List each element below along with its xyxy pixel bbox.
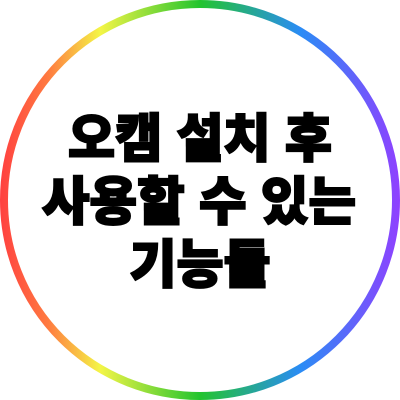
title <box>42 111 356 295</box>
title line 1: 오캠 설치 후 <box>68 111 332 169</box>
title line 2: 사용할 수 있는 <box>42 174 356 232</box>
title line 3: 기능들 <box>130 237 270 295</box>
